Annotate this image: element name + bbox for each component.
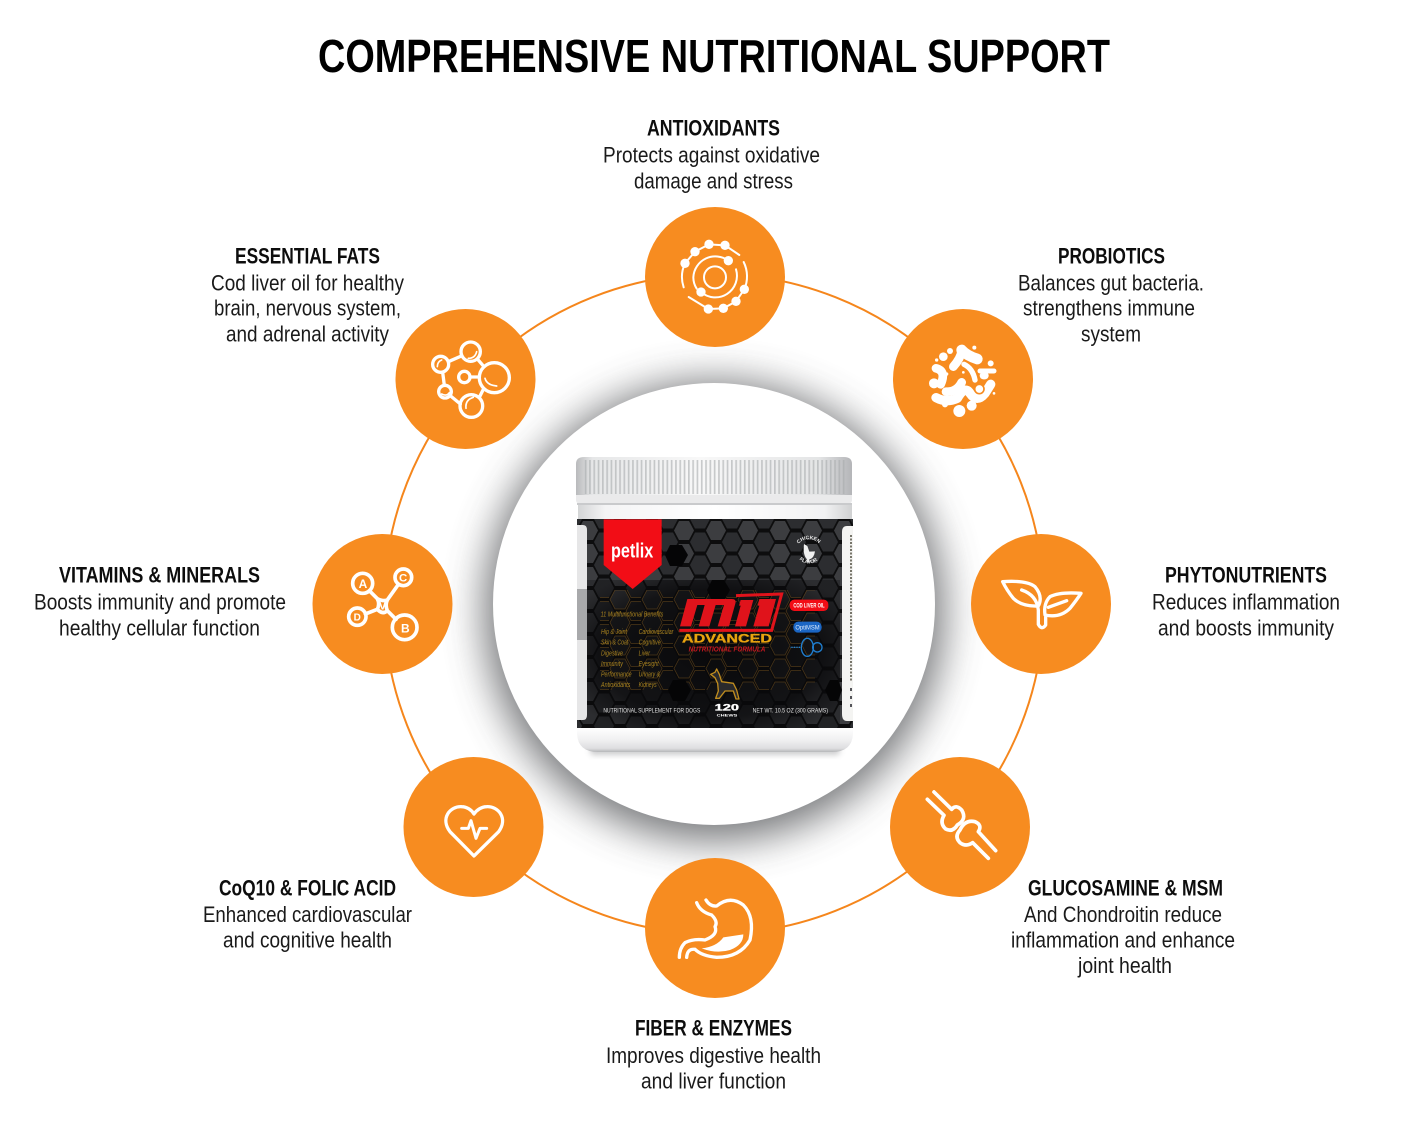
icon: vitamin molecule: D — [354, 613, 361, 624]
benefits list — [600, 610, 674, 689]
text block: essential fats: Cod liver oil for healthy — [211, 270, 404, 296]
black hexes — [665, 545, 842, 701]
icon: joint — [927, 792, 996, 858]
text block: glucosamine and msm: inflammation and enhance — [1011, 928, 1235, 952]
m11 logo — [679, 594, 782, 630]
text block: antioxidants: damage and stress — [634, 168, 793, 194]
chew count — [715, 703, 739, 718]
icon: bacteria cluster — [929, 346, 995, 417]
orange circle: antioxidants — [645, 207, 785, 347]
icon: sprout — [1003, 581, 1081, 628]
jar label — [577, 519, 853, 728]
chicken flavor badge — [796, 536, 821, 564]
orange circle: fiber — [645, 858, 785, 998]
benefits list: 11 Multifunctional Benefits — [601, 610, 664, 619]
text block: glucosamine and msm — [1011, 876, 1235, 978]
icon: vitamin molecule — [349, 569, 417, 640]
orange circle: glucosamine — [890, 757, 1030, 897]
connecting ring — [384, 274, 1044, 934]
text block: antioxidants: Protects against oxidative — [603, 142, 820, 168]
text block: coq10 and folic acid — [203, 876, 412, 952]
text block: coq10 and folic acid: CoQ10 & FOLIC ACID — [219, 876, 396, 900]
chew count: 120 — [715, 703, 739, 713]
benefits list: Skin & Coat — [601, 638, 629, 647]
red banner with brand — [604, 519, 662, 589]
benefits list: Hip & Joint — [601, 627, 628, 636]
benefits list: Digestive — [601, 648, 623, 657]
text block: essential fats: brain, nervous system, — [214, 296, 401, 320]
text block: coq10 and folic acid: Enhanced cardiovascular — [203, 902, 412, 927]
benefits list: Antioxidants — [600, 680, 631, 689]
text block: antioxidants: ANTIOXIDANTS — [647, 116, 780, 140]
label artwork — [600, 519, 828, 718]
jar cap — [576, 457, 852, 505]
jar ground shadow — [590, 746, 840, 755]
orange circle: phytonutrients — [971, 534, 1111, 674]
benefits list: Kidneys — [639, 680, 657, 689]
text block: probiotics: strengthens immune — [1023, 296, 1195, 320]
cod liver oil pill: COD LIVER OIL — [793, 603, 825, 609]
title: COMPREHENSIVE NUTRITIONAL SUPPORT — [318, 30, 1110, 82]
supplement caption: NUTRITIONAL SUPPLEMENT FOR DOGS — [603, 708, 701, 715]
icon: stomach — [679, 900, 751, 957]
product jar — [576, 457, 853, 758]
right label strip — [842, 526, 853, 721]
text block: probiotics: PROBIOTICS — [1058, 244, 1165, 268]
text block: fiber and enzymes: and liver function — [641, 1068, 786, 1094]
jar body — [578, 505, 852, 519]
text block: probiotics — [1018, 244, 1204, 346]
icon: atom rings — [680, 240, 749, 314]
coq10 mark — [791, 638, 822, 656]
text block: glucosamine and msm: And Chondroitin reduce — [1024, 902, 1222, 927]
chew count: CHEWS — [717, 714, 738, 718]
text block: phytonutrients: and boosts immunity — [1158, 616, 1334, 640]
orange circle: coq10 — [404, 757, 544, 897]
icon: vitamin molecule: A — [359, 577, 368, 591]
chicken flavor badge: CHICKEN — [796, 536, 821, 544]
orange circle: essential fats — [396, 309, 536, 449]
net weight: NET WT. 10.5 OZ (300 GRAMS) — [753, 708, 828, 715]
text block: fiber and enzymes: FIBER & ENZYMES — [635, 1016, 792, 1040]
icon: vitamin molecule: V — [379, 600, 387, 612]
nutritional formula text: NUTRITIONAL FORMULA — [689, 644, 765, 653]
orange circle: vitamins — [312, 534, 452, 674]
icon: vitamin molecule: B — [401, 621, 410, 635]
text block: essential fats — [211, 244, 404, 346]
text block: phytonutrients: Reduces inflammation — [1152, 590, 1340, 614]
left label strip — [577, 525, 587, 720]
text block: fiber and enzymes — [606, 1016, 821, 1094]
benefits list: Cognitive — [639, 638, 661, 647]
text block: vitamins and minerals: healthy cellular function — [59, 616, 260, 640]
text block: essential fats: and adrenal activity — [226, 322, 389, 346]
text block: essential fats: ESSENTIAL FATS — [235, 244, 380, 268]
benefits list: Immunity — [601, 659, 624, 668]
text block: vitamins and minerals: Boosts immunity and promote — [34, 590, 286, 614]
text block: fiber and enzymes: Improves digestive health — [606, 1043, 821, 1068]
text block: glucosamine and msm: joint health — [1077, 953, 1172, 978]
red banner with brand: petlix — [611, 540, 653, 562]
benefits list: Liver — [639, 648, 650, 657]
icon: vitamin molecule: C — [399, 573, 407, 585]
optimsm badge: OptiMSM — [795, 624, 820, 631]
icon: heart pulse — [446, 807, 503, 856]
text block: coq10 and folic acid: and cognitive health — [223, 928, 392, 952]
dog icon — [711, 669, 739, 699]
chicken flavor badge: FLAVOR — [800, 557, 818, 564]
optimsm badge — [793, 622, 822, 633]
text block: vitamins and minerals: VITAMINS & MINERALS — [59, 562, 260, 588]
icon: fat molecule — [433, 342, 509, 417]
cod liver oil pill — [790, 600, 828, 611]
text block: probiotics: Balances gut bacteria. — [1018, 270, 1204, 296]
benefits list: Urinary & — [639, 669, 660, 678]
central white circle with shadow — [484, 381, 944, 841]
benefits list: Performance — [601, 669, 632, 678]
text block: phytonutrients: PHYTONUTRIENTS — [1165, 562, 1327, 588]
orange circle: probiotics — [893, 309, 1033, 449]
text block: vitamins and minerals — [34, 562, 286, 640]
text block: antioxidants — [603, 116, 820, 194]
benefits list: Eyesight — [639, 659, 659, 668]
benefits list: Cardiovascular — [639, 627, 674, 636]
text block: probiotics: system — [1081, 322, 1141, 346]
text block: phytonutrients — [1152, 562, 1340, 640]
text block: glucosamine and msm: GLUCOSAMINE & MSM — [1028, 876, 1223, 900]
advanced text: ADVANCED — [682, 631, 772, 645]
